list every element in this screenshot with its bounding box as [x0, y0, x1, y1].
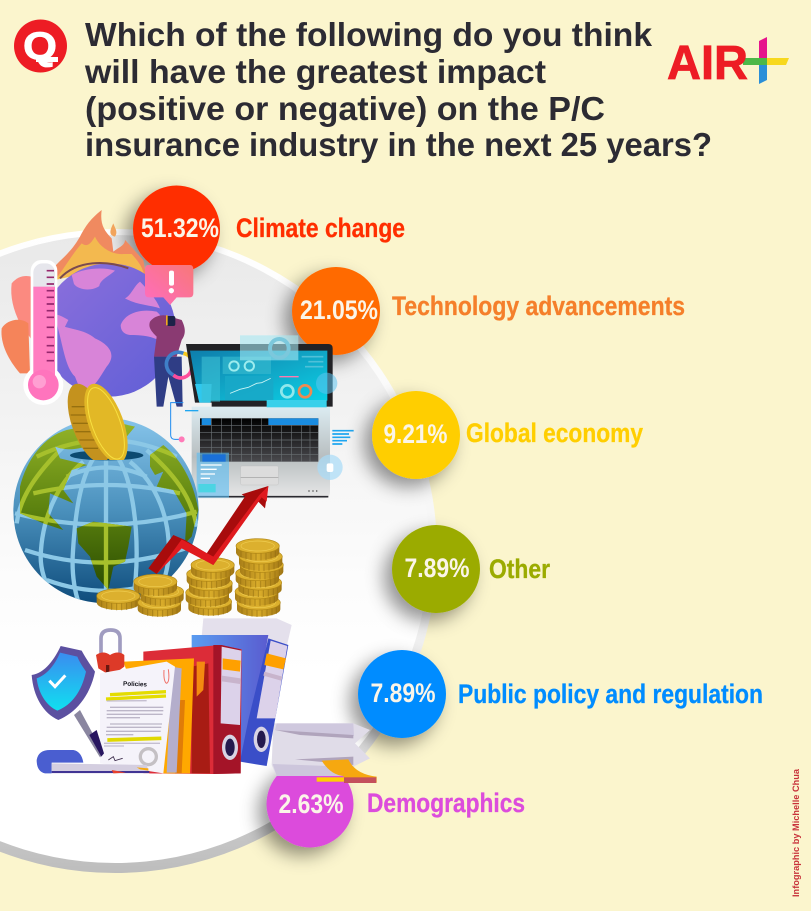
icon: laptop with dashboard — [171, 403, 354, 498]
label: other: Other — [489, 554, 550, 584]
person — [149, 315, 185, 407]
book stack top — [202, 618, 292, 647]
bubble: other 7.89% — [392, 525, 480, 613]
label: global economy: Global economy — [466, 418, 643, 448]
title — [84, 16, 712, 163]
open notebook — [37, 750, 149, 773]
bubble: demographics 2.63% — [266, 760, 354, 848]
panel: large white disc — [0, 229, 437, 873]
data lines — [332, 431, 354, 444]
title: insurance industry in the next 25 years? — [85, 126, 712, 163]
shield badge — [317, 455, 343, 480]
thermometer — [23, 260, 63, 405]
policy document — [100, 662, 182, 773]
label: public policy and regulation: Public policy and regulation — [458, 679, 763, 709]
donut chart — [166, 352, 192, 378]
title: (positive or negative) on the P/C — [85, 90, 605, 127]
bubble: technology advancements 21.05% — [292, 267, 380, 355]
bubble: other 7.89%: 7.89% — [404, 553, 470, 583]
icon: burning globe with thermometer and worried person — [1, 210, 193, 407]
shield on pen — [32, 646, 104, 757]
blue binder — [240, 638, 288, 766]
icon: policy documents, binders and shield — [32, 618, 377, 783]
alert bubble — [145, 265, 193, 305]
coin stacks — [97, 539, 283, 617]
credit: Infographic by Michelle Chua — [791, 768, 802, 897]
bubble: global economy 9.21% — [372, 391, 460, 479]
label: climate change: Climate change — [236, 213, 405, 243]
purple globe — [57, 262, 174, 396]
large coin in slot — [68, 384, 128, 460]
label: technology advancements: Technology advancements — [392, 291, 685, 321]
blue and green globe — [13, 418, 199, 607]
flames — [47, 210, 147, 280]
padlock — [96, 630, 124, 678]
logo: Q: Q — [23, 26, 57, 68]
bubble: technology advancements 21.05%: 21.05% — [300, 295, 378, 325]
coin slot — [70, 450, 143, 460]
sticky note — [317, 759, 377, 783]
logo: AIR+: AIR — [667, 37, 748, 90]
leaves — [1, 276, 37, 373]
bubble: public policy and regulation 7.89% — [358, 650, 446, 738]
orange folder — [123, 658, 194, 773]
laptop base — [192, 407, 330, 498]
logo: AIR+ — [667, 37, 789, 90]
blue binder back — [192, 635, 268, 762]
bubble: global economy 9.21%: 9.21% — [384, 419, 448, 449]
blue overlay panel — [197, 453, 229, 498]
rising red arrow — [148, 486, 268, 574]
title: Which of the following do you think — [85, 16, 653, 53]
red binder — [143, 645, 242, 774]
bubble: climate change 51.32% — [133, 186, 220, 272]
bubble: demographics 2.63%: 2.63% — [278, 789, 344, 819]
title: will have the greatest impact — [84, 53, 546, 90]
label: demographics: Demographics — [367, 788, 525, 818]
bubble: public policy and regulation 7.89%: 7.89% — [370, 678, 436, 708]
icon: globe with coin, coins and rising arrow — [13, 378, 283, 617]
logo: Q — [14, 20, 67, 72]
policy document: Policies — [123, 681, 148, 689]
paper stack right — [272, 723, 370, 776]
node connector — [171, 403, 198, 442]
icon: laptop screen — [186, 335, 337, 407]
bubble: climate change 51.32%: 51.32% — [141, 213, 219, 243]
